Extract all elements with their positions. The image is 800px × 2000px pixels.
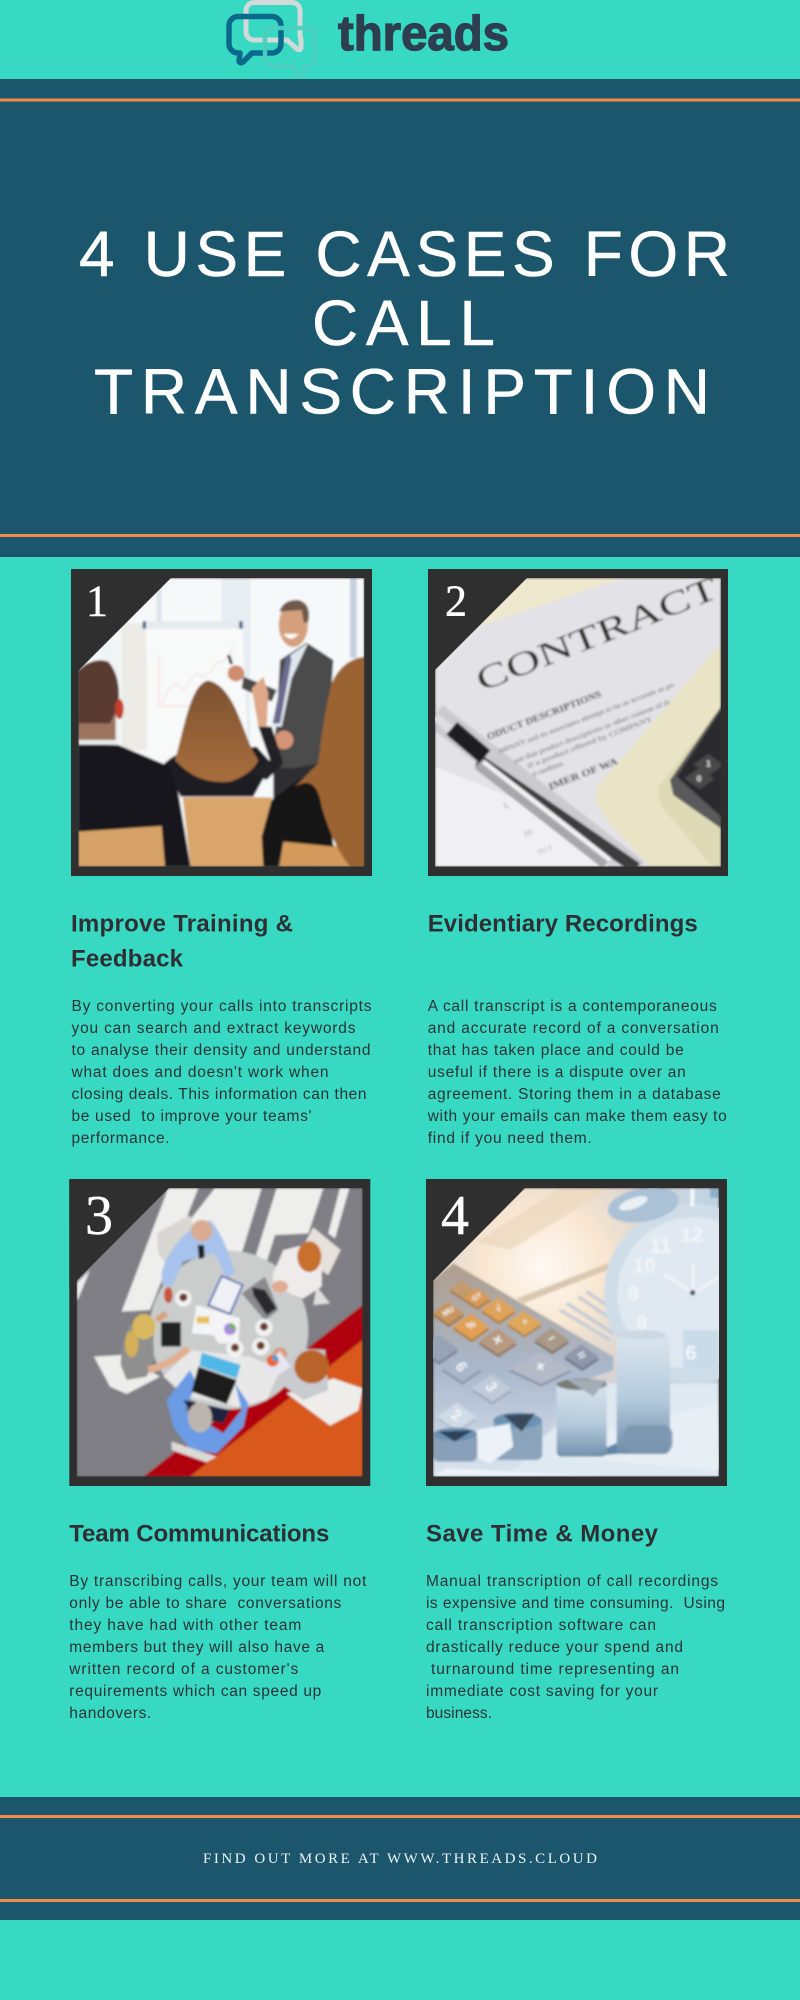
title: TRANSCRIPTION — [94, 356, 710, 428]
text block: improve training: to analyse their density and understand — [72, 1042, 370, 1059]
photo: calculator, clock and coins: 6 — [685, 1342, 697, 1364]
photo: contract and pen: L — [502, 800, 510, 810]
text block: improve training — [70, 998, 372, 1147]
photo: contract and pen: CONTRACT — [471, 570, 723, 699]
photo: calculator, clock and coins: GT — [470, 1290, 484, 1303]
text block: save time and money: turnaround time representing an — [431, 1661, 679, 1678]
panel: footer banner — [0, 1797, 800, 1920]
photo: calculator, clock and coins: 6 — [451, 1359, 470, 1375]
photo: calculator, clock and coins: ÷ — [520, 1316, 531, 1329]
panel: card 4 image — [426, 1179, 727, 1486]
photo: contract and pen: RE — [522, 827, 535, 839]
text block: save time and money: call transcription software can — [426, 1617, 656, 1634]
photo: calculator, clock and coins: 3 — [481, 1379, 500, 1395]
number badge 1: 1 — [86, 577, 108, 626]
text block: save time and money: drastically reduce your spend and — [426, 1639, 683, 1656]
text block: save time and money — [426, 1573, 725, 1722]
number badge 3 — [69, 1179, 178, 1288]
photo: calculator, clock and coins: × — [490, 1331, 506, 1350]
number badge 4: 4 — [441, 1185, 469, 1247]
number badge 4 — [426, 1179, 534, 1288]
title: CALL — [312, 287, 495, 359]
photo: calculator, clock and coins: 8 — [636, 1312, 647, 1334]
text block: team communications: By transcribing calls, your team will not — [69, 1573, 367, 1590]
calculator keys — [433, 1280, 600, 1428]
text block: save time and money: is expensive and time consuming. Using — [426, 1595, 725, 1612]
icon: grey speech bubble — [246, 2, 301, 50]
icon: blue speech bubble — [229, 16, 281, 63]
heading: improve training — [71, 911, 293, 973]
footer call to action: FIND OUT MORE AT WWW.THREADS.CLOUD — [203, 1851, 597, 1867]
panel: card 2 image — [428, 569, 728, 876]
photo: calculator, clock and coins: − — [544, 1330, 559, 1347]
text block: team communications — [68, 1573, 367, 1722]
text block: save time and money: Manual transcription of call recordings — [426, 1573, 718, 1590]
text block: team communications: they have had with other team — [69, 1617, 301, 1634]
panel: card 1 image — [71, 569, 372, 876]
logo: threads — [229, 2, 509, 76]
text block: team communications: written record of a customer's — [68, 1661, 299, 1678]
photo: contract and pen: TO T — [536, 843, 554, 857]
photo: calculator, clock and coins: MU — [441, 1304, 456, 1318]
text block: team communications: members but they will also have a — [69, 1639, 325, 1656]
text block: evidentiary recordings — [427, 998, 727, 1147]
heading: evidentiary recordings: Evidentiary Recordings — [428, 911, 698, 938]
photo: contract and pen: MPANY and its associates attempt to be as accurate as po — [498, 681, 676, 755]
photo: contract and pen: If a product offered by COMPANY — [526, 715, 654, 770]
text block: evidentiary recordings: useful if there is a dispute over an — [428, 1064, 686, 1081]
text block: evidentiary recordings: that has taken place and could be — [428, 1042, 684, 1059]
heading: improve training: Improve Training & — [71, 911, 293, 938]
photo: calculator, clock and coins — [433, 1188, 719, 1477]
coin stacks — [433, 1330, 720, 1477]
text block: improve training: be used to improve your teams' — [72, 1108, 312, 1125]
photo: calculator, clock and coins: + — [532, 1356, 550, 1377]
number badge 2 — [428, 569, 536, 677]
text block: team communications: only be able to share conversations — [69, 1595, 342, 1612]
text block: improve training: you can search and extract keywords — [72, 1020, 356, 1037]
text block: team communications: handovers. — [69, 1705, 151, 1722]
text block: improve training: what does and doesn't work when — [70, 1064, 328, 1081]
photo: contract and pen: ant that product descriptions or other content of th — [513, 698, 672, 765]
text block: evidentiary recordings: and accurate record of a conversation — [428, 1020, 719, 1037]
photo: contract and pen: ODUCT DESCRIPTIONS — [485, 689, 603, 743]
logo wordmark: threads — [338, 7, 509, 61]
photo: calculator, clock and coins: 12 — [681, 1225, 703, 1247]
number badge 2: 2 — [445, 577, 467, 626]
text block: improve training: performance. — [72, 1130, 170, 1147]
heading: save time and money: Save Time & Money — [426, 1521, 659, 1548]
title — [79, 218, 730, 428]
photo: contract and pen — [435, 570, 723, 872]
photo: training session — [78, 578, 364, 867]
text block: evidentiary recordings: find if you need them. — [428, 1130, 592, 1147]
panel: card 3 image — [69, 1179, 370, 1486]
text block: evidentiary recordings: agreement. Storing them in a database — [428, 1086, 721, 1103]
photo: contract and pen: 1 — [706, 759, 711, 769]
photo: calculator, clock and coins: 2 — [448, 1406, 464, 1425]
photo: calculator, clock and coins: 11 — [650, 1235, 671, 1257]
text block: improve training: By converting your calls into transcripts — [72, 998, 372, 1015]
number badge 3: 3 — [85, 1185, 113, 1247]
photo: calculator, clock and coins: √ — [494, 1303, 504, 1315]
text block: evidentiary recordings: with your emails can make them easy to — [427, 1108, 727, 1125]
text block: save time and money: immediate cost saving for your — [426, 1683, 658, 1700]
photo: team meeting from above — [77, 1188, 363, 1477]
heading: team communications: Team Communications — [69, 1521, 329, 1548]
text block: evidentiary recordings: A call transcript is a contemporaneous — [428, 998, 717, 1015]
panel: title banner — [0, 79, 800, 557]
number badge 1 — [71, 569, 180, 678]
photo: calculator, clock and coins: 10 — [633, 1256, 655, 1278]
text block: save time and money: business. — [426, 1705, 492, 1722]
heading: improve training: Feedback — [71, 946, 184, 973]
photo: calculator, clock and coins: 9 — [628, 1284, 639, 1306]
photo: calculator, clock and coins: % — [465, 1319, 478, 1333]
text block: team communications: requirements which can speed up — [69, 1683, 321, 1700]
text block: improve training: closing deals. This information can then — [72, 1086, 366, 1103]
photo: contract and pen: 0 — [697, 773, 702, 783]
title: 4 USE CASES FOR — [79, 218, 730, 290]
photo: contract and pen: IMER OF WA — [547, 756, 620, 793]
icon: teal speech bubble — [265, 28, 315, 76]
photo: contract and pen: d condition. — [531, 759, 565, 779]
photo: calculator, clock and coins: = — [574, 1346, 589, 1363]
